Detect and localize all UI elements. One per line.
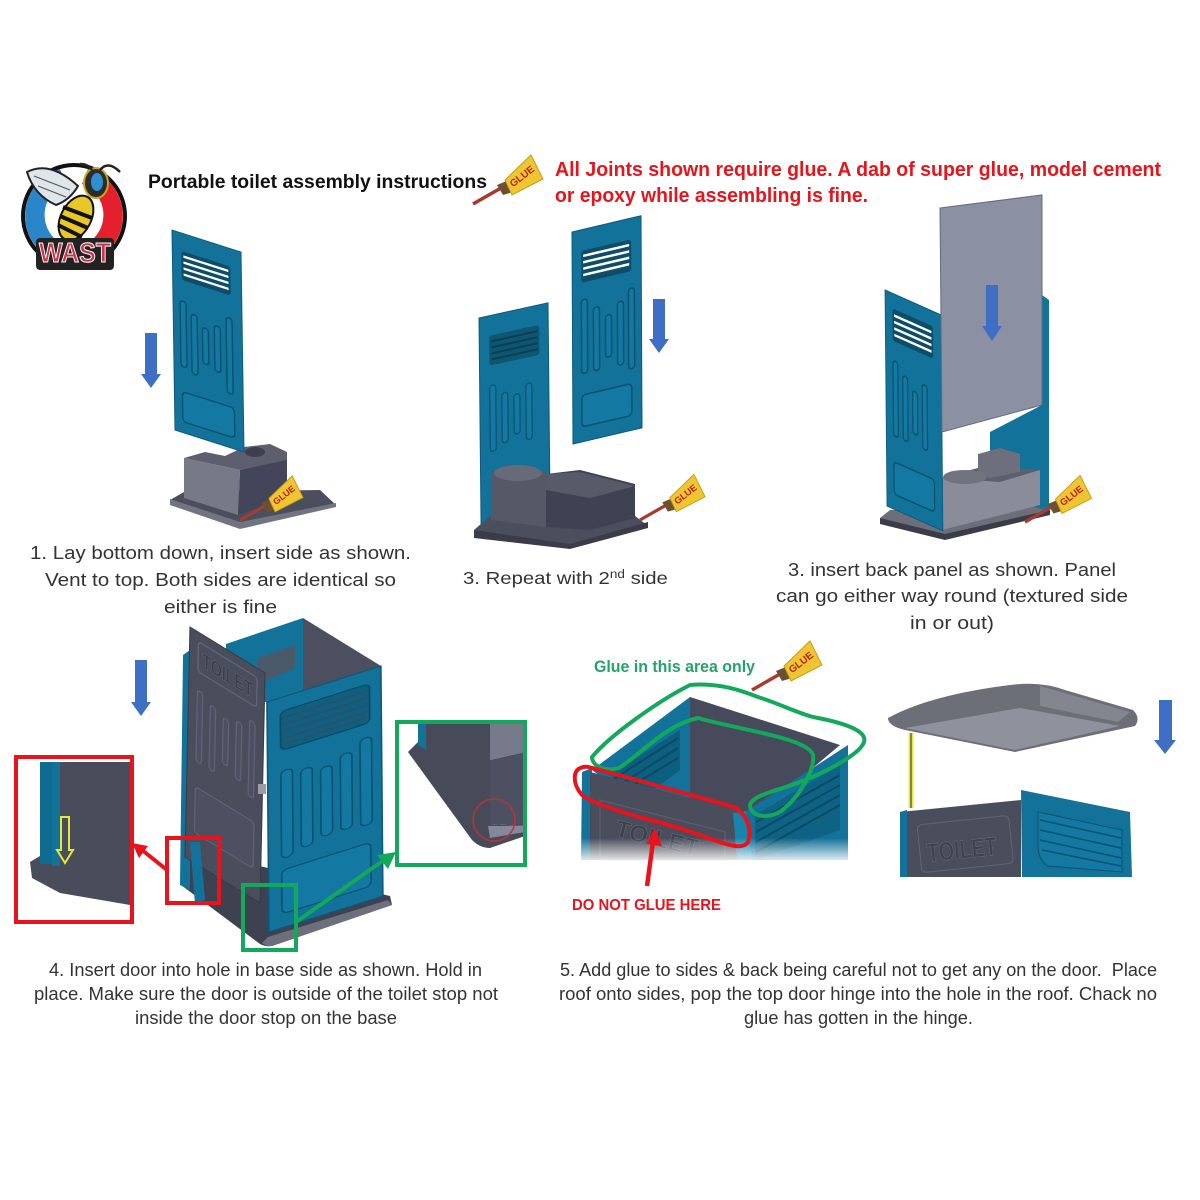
- step 3 caption: [776, 560, 1128, 633]
- glue tube step 3: GLUE: [1058, 484, 1086, 509]
- step 5 illustration: open booth top: [575, 684, 864, 886]
- step 2 caption: nd: [610, 567, 625, 581]
- red no-glue loop: [575, 767, 749, 846]
- step 3 caption: in or out): [910, 613, 994, 633]
- glue tube step 2: [640, 474, 705, 520]
- glue here label: Glue in this area only: [594, 657, 756, 676]
- step 3 illustration: [880, 195, 1050, 540]
- step 2 caption: side: [625, 569, 668, 589]
- back wall: [690, 697, 840, 825]
- glue tube step 5: GLUE: [787, 650, 816, 676]
- red highlight box and arrow: [132, 838, 219, 904]
- left panel: [885, 290, 943, 531]
- red glue warning: All Joints shown require glue. A dab of super glue, model cement: [555, 159, 1161, 181]
- logo: wasp badge: [21, 163, 127, 270]
- step 5 caption: 5. Add glue to sides & back being careful not to get any on the door. Place: [560, 960, 1157, 980]
- inner left wall: [592, 697, 690, 812]
- step 4 caption: [34, 960, 498, 1028]
- step 3 caption: 3. insert back panel as shown. Panel: [788, 560, 1116, 580]
- outer right face: [745, 745, 848, 860]
- left panel: [479, 303, 550, 530]
- icon: glue tube by title: [473, 155, 543, 204]
- base block: [184, 444, 287, 515]
- red arrow: [647, 842, 653, 886]
- down arrow: [982, 285, 1002, 341]
- step 4 caption: inside the door stop on the base: [135, 1008, 397, 1028]
- step 5 illustration: open booth top: TOILET: [613, 816, 702, 862]
- right panel: [572, 216, 642, 444]
- step 4 caption: 4. Insert door into hole in base side as shown. Hold in: [49, 960, 482, 980]
- step 5 caption: glue has gotten in the hinge.: [744, 1008, 973, 1028]
- bottom fade: [575, 838, 855, 864]
- glue tube step 5: [752, 641, 822, 690]
- green inset: base corner detail: [397, 722, 525, 865]
- red inset: door hole detail: [16, 757, 132, 922]
- step 3 caption: can go either way round (textured side: [776, 586, 1128, 606]
- step 1 caption: [30, 543, 411, 617]
- step 2 caption: 3. Repeat with 2: [463, 569, 610, 589]
- corner post: [733, 811, 752, 860]
- interior teal wall: [226, 618, 303, 702]
- do not glue label: DO NOT GLUE HERE: [572, 897, 721, 914]
- step 1 illustration: [141, 230, 336, 529]
- base: [474, 512, 648, 548]
- step 5 caption: roof onto sides, pop the top door hinge into the hole in the roof. Chack no: [559, 984, 1157, 1004]
- side top: [1021, 790, 1132, 877]
- step 5 illustration: roof and top of booth: [888, 684, 1176, 877]
- step 4 illustration: booth: [131, 618, 392, 946]
- step 2 illustration: [474, 216, 669, 549]
- base plate: [181, 850, 392, 946]
- door top: [900, 800, 1021, 877]
- red glue warning: [555, 159, 1161, 207]
- logo: wasp badge: WAST: [39, 237, 111, 268]
- step 5 illustration: roof and top of booth: TOILET: [925, 831, 998, 868]
- step 1 caption: either is fine: [164, 597, 277, 617]
- green highlight box and arrow: [243, 852, 396, 950]
- right panel: [990, 295, 1049, 524]
- door: TOILET: [202, 648, 253, 703]
- yellow arrow: [908, 733, 914, 808]
- down arrow: [141, 333, 161, 388]
- glue tube step 3: [1025, 475, 1092, 522]
- step 1 caption: Vent to top. Both sides are identical so: [45, 570, 396, 590]
- glue tube step 1: GLUE: [271, 483, 297, 507]
- door face: [590, 772, 745, 860]
- red glue warning: or epoxy while assembling is fine.: [555, 185, 868, 207]
- back panel: [940, 195, 1042, 432]
- step 4 caption: place. Make sure the door is outside of the toilet stop not: [34, 984, 498, 1004]
- down arrow: [649, 299, 669, 353]
- step 1 caption: 1. Lay bottom down, insert side as shown.: [30, 543, 411, 563]
- glue tube step 2: GLUE: [672, 482, 699, 506]
- green glue loop: [592, 684, 864, 816]
- icon: glue tube by title: GLUE: [508, 164, 537, 190]
- down arrow: [1154, 700, 1176, 754]
- glue tube step 1: [240, 476, 303, 520]
- door latch: [258, 784, 266, 794]
- roof: [888, 684, 1138, 752]
- door edge: [180, 650, 190, 890]
- title: Portable toilet assembly instructions: [148, 172, 487, 193]
- base: [880, 505, 1050, 538]
- down arrow: [131, 660, 151, 716]
- interior back wall: [267, 618, 381, 710]
- left edge: [581, 768, 592, 860]
- door: [185, 627, 265, 903]
- base plate: [170, 490, 336, 528]
- side panel: [172, 230, 244, 452]
- right face: [267, 666, 383, 932]
- step 5 caption: [559, 960, 1157, 1028]
